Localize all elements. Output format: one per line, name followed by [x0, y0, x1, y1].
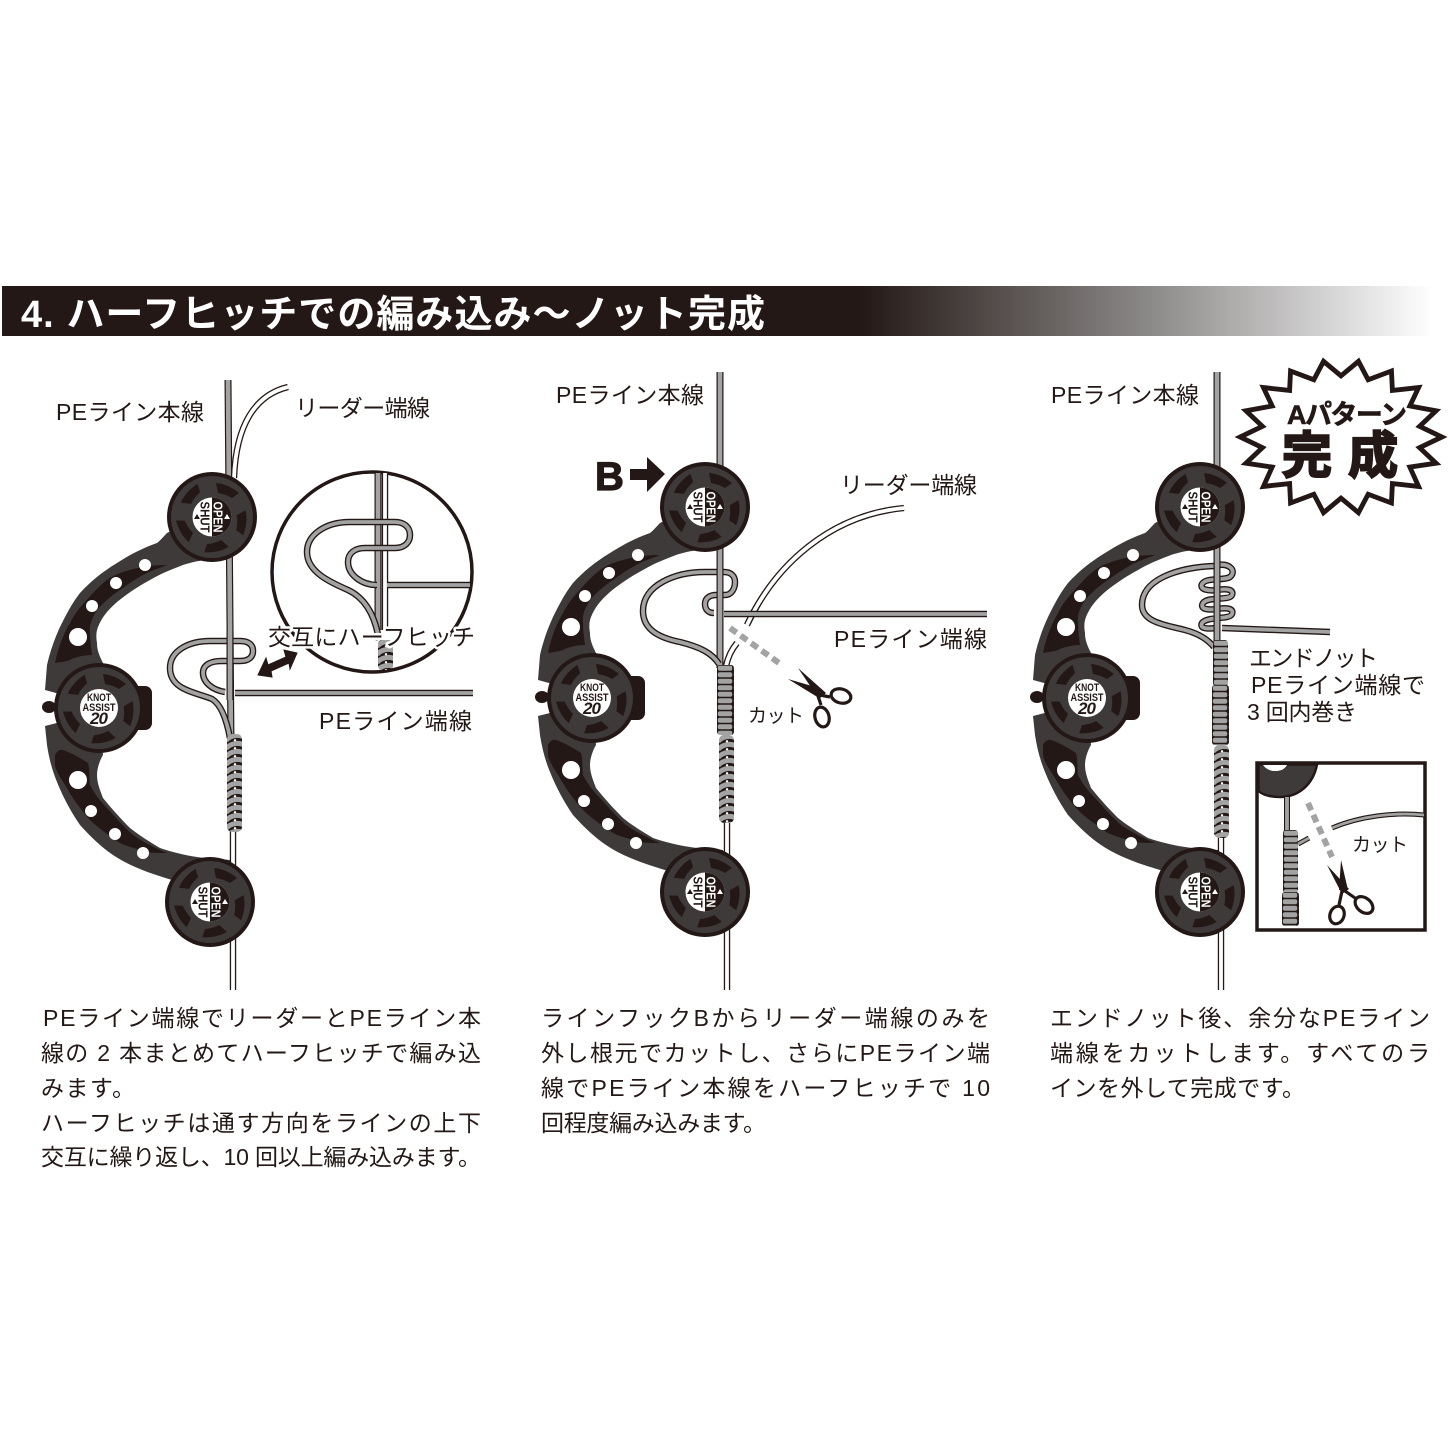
middle dial	[54, 663, 144, 753]
description 1: PEライン端線でリーダーとPEライン本	[43, 1005, 481, 1031]
description 3: エンドノット後、余分なPEライン	[1050, 1005, 1430, 1031]
label: cut: カット	[1352, 835, 1408, 856]
title: 4. ハーフヒッチでの編み込み～ノット完成	[21, 294, 765, 336]
half hitch loop	[170, 630, 473, 738]
description 1: 交互に繰り返し、10 回以上編み込みます。	[41, 1144, 481, 1170]
label: PE main line: PEライン本線	[56, 399, 204, 425]
middle dial: 20	[582, 699, 602, 718]
middle dial: ASSIST	[1070, 692, 1104, 704]
description 2	[541, 1005, 990, 1136]
description 1: みます。	[41, 1075, 135, 1101]
lines	[720, 372, 904, 990]
B arrow	[595, 455, 665, 499]
bottom dial: OPEN	[1198, 876, 1214, 908]
title bar	[2, 286, 1432, 336]
end knot stack	[1212, 640, 1229, 838]
description 3: インを外して完成です。	[1050, 1075, 1305, 1101]
top dial: SHUT	[690, 492, 706, 523]
bottom dial: SHUT	[1186, 876, 1200, 908]
bottom dial	[660, 847, 750, 937]
label: cut: カット	[748, 706, 804, 727]
tool	[535, 462, 750, 937]
middle dial: 20	[1077, 699, 1097, 718]
middle dial: ASSIST	[82, 702, 116, 714]
top dial: OPEN	[210, 502, 226, 532]
middle dial: 20	[89, 709, 109, 728]
badge title: 完成	[1282, 428, 1398, 484]
label: PE main line: PEライン本線	[1051, 382, 1199, 408]
description 3	[1050, 1005, 1430, 1101]
label: leader tail: リーダー端線	[295, 395, 430, 421]
starburst badge	[1240, 361, 1442, 513]
PE main line and leader	[228, 380, 288, 990]
panel: step 2 cut leader	[535, 372, 990, 1136]
label: end knot: エンドノット	[1249, 645, 1378, 671]
middle dial	[547, 653, 637, 743]
panel: step 3 finish	[1030, 361, 1442, 1101]
top dial	[167, 472, 257, 562]
middle dial: KNOT	[87, 692, 111, 704]
scissors	[1327, 860, 1376, 926]
description 1: ハーフヒッチは通す方向をラインの上下	[41, 1110, 481, 1136]
double arrow	[258, 650, 297, 677]
bottom dial: SHUT	[196, 886, 210, 918]
middle dial: KNOT	[580, 682, 604, 694]
description 2: 外し根元でカットし、さらにPEライン端	[541, 1040, 990, 1066]
description 1	[41, 1005, 481, 1170]
B arrow: B	[595, 455, 624, 499]
label: alternate half hitch: 交互にハーフヒッチ	[268, 624, 475, 650]
description 3: 端線をカットします。すべてのラ	[1050, 1040, 1430, 1066]
half hitch loop	[643, 560, 987, 664]
half hitch knot	[227, 734, 242, 832]
bottom dial	[1155, 847, 1245, 937]
tool	[42, 472, 257, 947]
middle dial: KNOT	[1075, 682, 1099, 694]
scissors	[788, 668, 852, 728]
bottom dial: SHUT	[690, 876, 706, 908]
magnified detail circle	[272, 472, 472, 672]
bottom dial	[165, 857, 255, 947]
tool	[1030, 462, 1245, 937]
top dial	[660, 462, 750, 552]
cut line	[730, 628, 779, 663]
bottom dial: OPEN	[208, 886, 224, 918]
knot stack	[717, 665, 734, 735]
top dial: OPEN	[1198, 492, 1214, 522]
panel: step 1 half hitch	[41, 380, 481, 1170]
description 1: 線の 2 本まとめてハーフヒッチで編み込	[41, 1040, 481, 1066]
label: end knot: PEライン端線で	[1251, 672, 1425, 698]
inset: cut detail	[1257, 763, 1425, 930]
top dial: SHUT	[198, 502, 212, 533]
description 2: 回程度編み込みます。	[541, 1110, 766, 1136]
top dial: OPEN	[704, 492, 718, 522]
middle dial: ASSIST	[576, 692, 609, 704]
top dial	[1155, 462, 1245, 552]
bottom dial: OPEN	[704, 876, 718, 908]
description 2: 線でPEライン本線をハーフヒッチで 10	[541, 1075, 990, 1101]
label: end knot: 3 回内巻き	[1247, 699, 1357, 725]
lines	[1142, 372, 1330, 990]
label: PE tail: PEライン端線	[834, 626, 987, 652]
label: end knot	[1247, 645, 1425, 725]
label: PE main line: PEライン本線	[556, 382, 704, 408]
label: leader tail: リーダー端線	[840, 472, 977, 498]
top dial: SHUT	[1186, 492, 1200, 523]
badge text: Aパターン	[1287, 400, 1407, 430]
middle dial	[1042, 653, 1132, 743]
description 2: ラインフックBからリーダー端線のみを	[541, 1005, 990, 1031]
braid	[719, 735, 734, 823]
label: PE tail: PEライン端線	[319, 708, 472, 734]
